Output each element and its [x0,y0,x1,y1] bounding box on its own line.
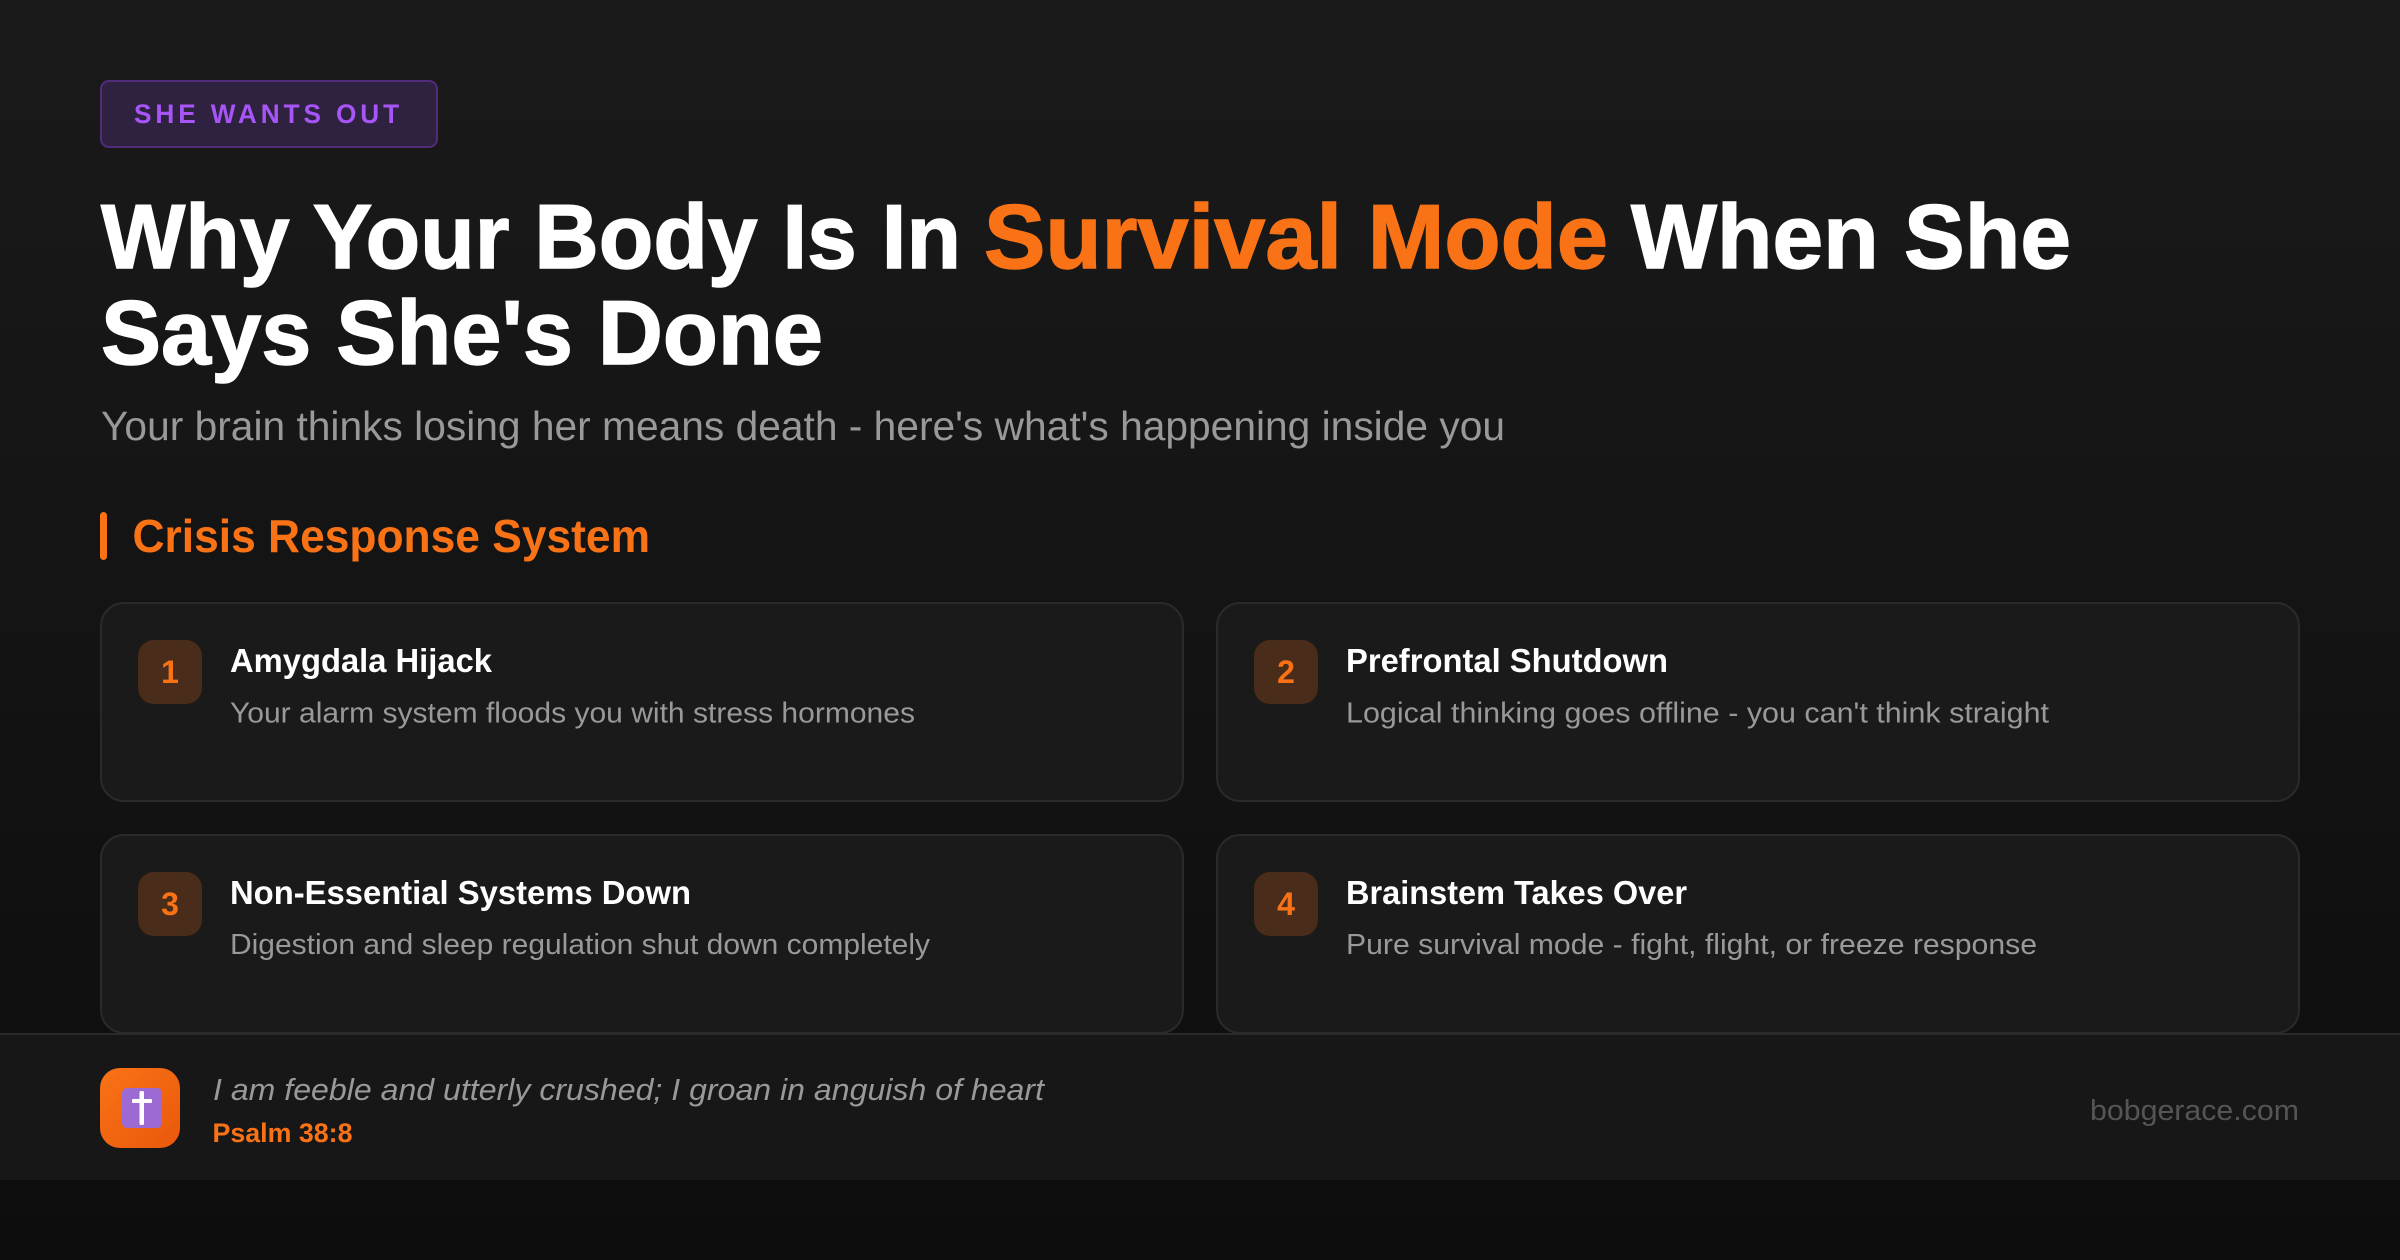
card 2: prefrontal shutdown [1217,603,2299,801]
badge: she wants out: SHE WANTS OUT [134,99,403,129]
card 2: prefrontal shutdown: Logical thinking goes offline - you can't think straight [1346,698,2049,730]
number 3: 3 [161,886,179,922]
icon: cross [100,1068,180,1148]
scripture quote: I am feeble and utterly crushed; I groan in anguish of heart [213,1072,1045,1107]
title [101,187,2071,384]
section heading: crisis response system: Crisis Response System [132,510,650,562]
card 1: amygdala hijack [101,603,1183,801]
card 3: non-essential systems down: Digestion and sleep regulation shut down completely [230,929,931,961]
number 1: 1 [161,654,179,690]
badge: she wants out [101,81,437,147]
number 2 [1254,640,1318,704]
subtitle: Your brain thinks losing her means death - here's what's happening inside you [101,403,1505,449]
title: Says She's Done [101,283,823,384]
card 1: amygdala hijack: Your alarm system floods you with stress hormones [230,698,915,730]
card 4: brainstem takes over [1217,835,2299,1033]
card 3: non-essential systems down [101,835,1183,1033]
title: When She [1631,187,2071,288]
number 4 [1254,872,1318,936]
card 3: non-essential systems down: Non-Essential Systems Down [230,875,691,912]
number 4: 4 [1277,886,1295,922]
card 1: amygdala hijack: Amygdala Hijack [230,643,492,680]
number 2: 2 [1277,654,1295,690]
card 2: prefrontal shutdown: Prefrontal Shutdown [1346,643,1668,680]
title: Survival Mode [984,187,1608,288]
footer bar [0,1033,2400,1180]
title: Why Your Body Is In [101,187,961,288]
number 3 [138,872,202,936]
card 4: brainstem takes over: Brainstem Takes Over [1346,875,1687,912]
website: bobgerace.com [2090,1095,2299,1127]
scripture reference: Psalm 38:8 [212,1118,352,1148]
number 1 [138,640,202,704]
card 4: brainstem takes over: Pure survival mode - fight, flight, or freeze response [1346,929,2037,961]
